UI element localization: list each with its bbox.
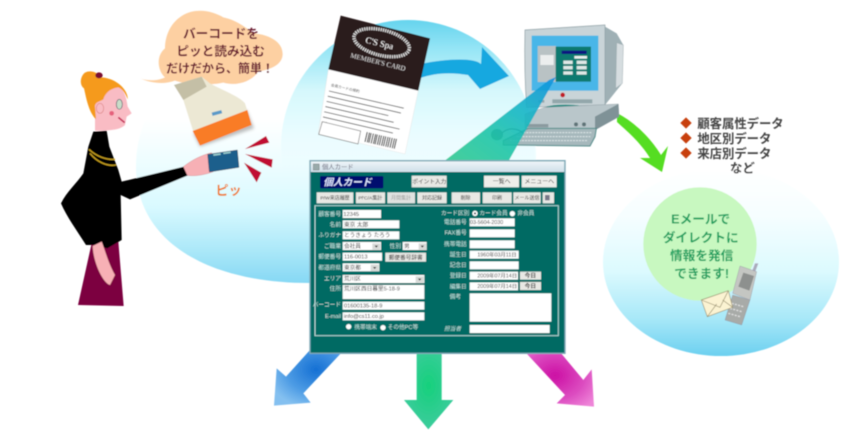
card printed notes — [321, 82, 406, 142]
tab buttons: P/W来店履歴 — [320, 196, 350, 202]
skirt — [78, 242, 124, 306]
radio terminal options: 携帯端末 — [354, 323, 377, 331]
barcode — [365, 132, 396, 149]
right labels: 備考 — [450, 292, 461, 300]
title text: 個人カード — [322, 162, 354, 171]
form banner — [320, 176, 383, 188]
screen photo — [538, 46, 556, 82]
mouse — [491, 129, 503, 140]
window frame — [310, 161, 565, 353]
person — [61, 11, 283, 306]
red beep marks — [244, 136, 273, 182]
hair — [81, 71, 128, 119]
head — [81, 71, 132, 131]
member card — [318, 16, 430, 154]
left field values: 会社員 — [344, 242, 361, 250]
card front black — [328, 16, 430, 91]
scrunchie — [95, 72, 103, 78]
left labels: ふりガナ — [318, 231, 341, 239]
tab buttons — [317, 192, 554, 203]
background circle: right email area — [603, 168, 839, 356]
right labels: 編集日 — [450, 283, 467, 291]
card back white — [318, 69, 418, 154]
left fields — [343, 210, 427, 320]
right field values — [470, 220, 517, 290]
right labels: 電話番号 — [444, 219, 467, 226]
right labels: 携帯電話 — [444, 240, 467, 248]
member card in hand — [208, 150, 239, 172]
speech bubble — [141, 11, 283, 84]
monitor front — [525, 25, 605, 107]
scanner body — [174, 77, 252, 146]
tab buttons: 対応記録 — [422, 195, 442, 202]
email message: 情報を発信 — [670, 248, 734, 263]
right labels — [444, 219, 467, 333]
arrow: teal beam from computer to form — [443, 77, 556, 162]
power button — [560, 93, 565, 97]
top buttons: ポイント入力 — [412, 178, 447, 186]
top buttons: メニューへ — [524, 179, 554, 186]
left field values: 東京都 — [344, 263, 361, 271]
card type radios: カード会員 — [479, 209, 508, 217]
left hand — [93, 242, 115, 285]
ear — [96, 103, 104, 113]
left field values: 荒川区西日暮里5-18-9 — [344, 284, 400, 292]
radio terminal options — [346, 323, 418, 331]
left field values: 男 — [404, 243, 410, 250]
left labels: 郵便番号 — [318, 253, 341, 261]
tab buttons: 印刷 — [492, 195, 502, 202]
left labels: 顧客番号 — [318, 210, 341, 218]
green email circle — [643, 187, 757, 301]
left labels — [313, 210, 401, 320]
icon: phone — [725, 263, 758, 325]
today buttons — [520, 272, 541, 290]
right labels: FAX番号 — [445, 229, 467, 236]
data labels: など — [730, 161, 755, 176]
left labels: 住所 — [330, 284, 341, 292]
speech bubble text — [166, 27, 274, 76]
computer — [491, 25, 623, 146]
title icon — [313, 164, 319, 170]
monitor vents — [552, 99, 592, 103]
today buttons: 今日 — [525, 282, 536, 290]
right labels: 登録日 — [450, 271, 467, 279]
tab buttons: 削除 — [461, 195, 471, 202]
left labels: E-mail — [325, 314, 341, 320]
email message: ダイレクトに — [663, 230, 739, 245]
left field values: info@cs11.co.jp — [344, 314, 384, 320]
right labels: 記念日 — [450, 262, 467, 269]
face and neck — [95, 86, 132, 131]
card type radios: 非会員 — [517, 209, 535, 217]
background circle: cyan behind card — [281, 20, 535, 274]
right labels: 誕生日 — [450, 251, 467, 259]
left labels: 性別 — [390, 242, 401, 250]
right fields — [470, 218, 551, 333]
monitor base — [545, 105, 586, 111]
eye — [116, 99, 122, 109]
right field values: 1960年03月11日 — [477, 251, 517, 259]
left labels: エリア — [324, 275, 341, 282]
monitor side — [605, 27, 623, 105]
necklace — [89, 149, 116, 165]
tab buttons: メール送信 — [515, 195, 539, 202]
tab buttons: 月間集計 — [391, 195, 411, 202]
icon: envelope — [701, 291, 733, 317]
data labels: 来店別データ — [697, 146, 771, 161]
card label: MEMBER'S CARD — [350, 52, 406, 73]
arrow: green from computer to email — [617, 113, 668, 172]
data labels: 顧客属性データ — [697, 116, 784, 131]
left field values — [343, 212, 410, 320]
arrow: blue down-left — [274, 350, 344, 406]
tab buttons: Pf'C/A集計 — [358, 195, 382, 202]
arrow: green down — [404, 350, 453, 429]
card logo wreath — [351, 24, 412, 62]
right labels: 担当者 — [444, 326, 462, 333]
card printed notes: 氏名 — [321, 120, 329, 127]
form banner text: 個人カード — [323, 176, 373, 188]
speech bubble text: だけだから、簡単！ — [166, 61, 274, 76]
inner panel — [315, 206, 558, 336]
left field values: 東京 太郎 — [344, 220, 369, 228]
cheek and lips — [109, 111, 114, 116]
speech bubble text: バーコードを — [183, 27, 259, 41]
card type radios: カード区別 — [441, 209, 470, 217]
customer data list — [643, 116, 784, 325]
arrow: blue from card to computer — [420, 47, 509, 89]
screen — [532, 36, 598, 91]
left labels: ご職業 — [324, 242, 341, 250]
scanner logo — [212, 110, 222, 116]
email message — [663, 212, 739, 281]
torso and left arm — [61, 131, 188, 248]
today buttons: 今日 — [525, 272, 536, 280]
title bar — [311, 161, 564, 172]
diamond bullets — [680, 117, 692, 159]
right field values: 2009年07月14日 — [477, 282, 517, 290]
top buttons — [412, 176, 557, 187]
speech bubble text: ピッと読み込む — [176, 43, 265, 58]
left field values: 12345 — [343, 212, 359, 218]
data labels — [697, 116, 784, 176]
dropdown buttons — [371, 243, 549, 332]
postal code button text: 郵便番号辞書 — [389, 253, 423, 261]
left field values: とうきょう たろう — [344, 232, 390, 239]
left labels: 名前 — [330, 220, 341, 228]
radio terminal options: その他PC等 — [388, 323, 418, 331]
postal code button — [385, 253, 426, 262]
right hand — [183, 153, 213, 176]
scanner orange band — [193, 110, 252, 146]
left field values: 荒川区 — [344, 275, 361, 283]
left field values: 01600135-18-9 — [344, 303, 382, 309]
desktop unit — [525, 104, 619, 130]
email message: できます! — [674, 267, 729, 281]
arrows below form — [274, 350, 594, 429]
signature box — [319, 122, 361, 144]
beep label: ピッ — [216, 183, 242, 198]
right field values: 03-5604-2030 — [470, 220, 503, 226]
left labels: 都道府県 — [318, 263, 341, 271]
data labels: 地区別データ — [697, 131, 771, 146]
card logo text: C'S Spa — [365, 35, 394, 51]
card printed notes: 会員カードの規約 — [331, 82, 361, 94]
left field values: 116-0013 — [344, 255, 367, 261]
keyboard — [503, 128, 596, 146]
customer form window — [310, 161, 565, 353]
screen form — [556, 47, 591, 82]
card type radios — [441, 209, 535, 217]
left labels: バーコード — [313, 302, 341, 309]
right field values: 2009年07月14日 — [477, 271, 517, 279]
top buttons: 一覧へ — [493, 178, 511, 186]
arrow: magenta down-right — [523, 350, 594, 407]
scanner shadow — [193, 110, 254, 147]
background blob: left pale area — [136, 48, 536, 283]
email message: Eメールで — [671, 212, 730, 226]
